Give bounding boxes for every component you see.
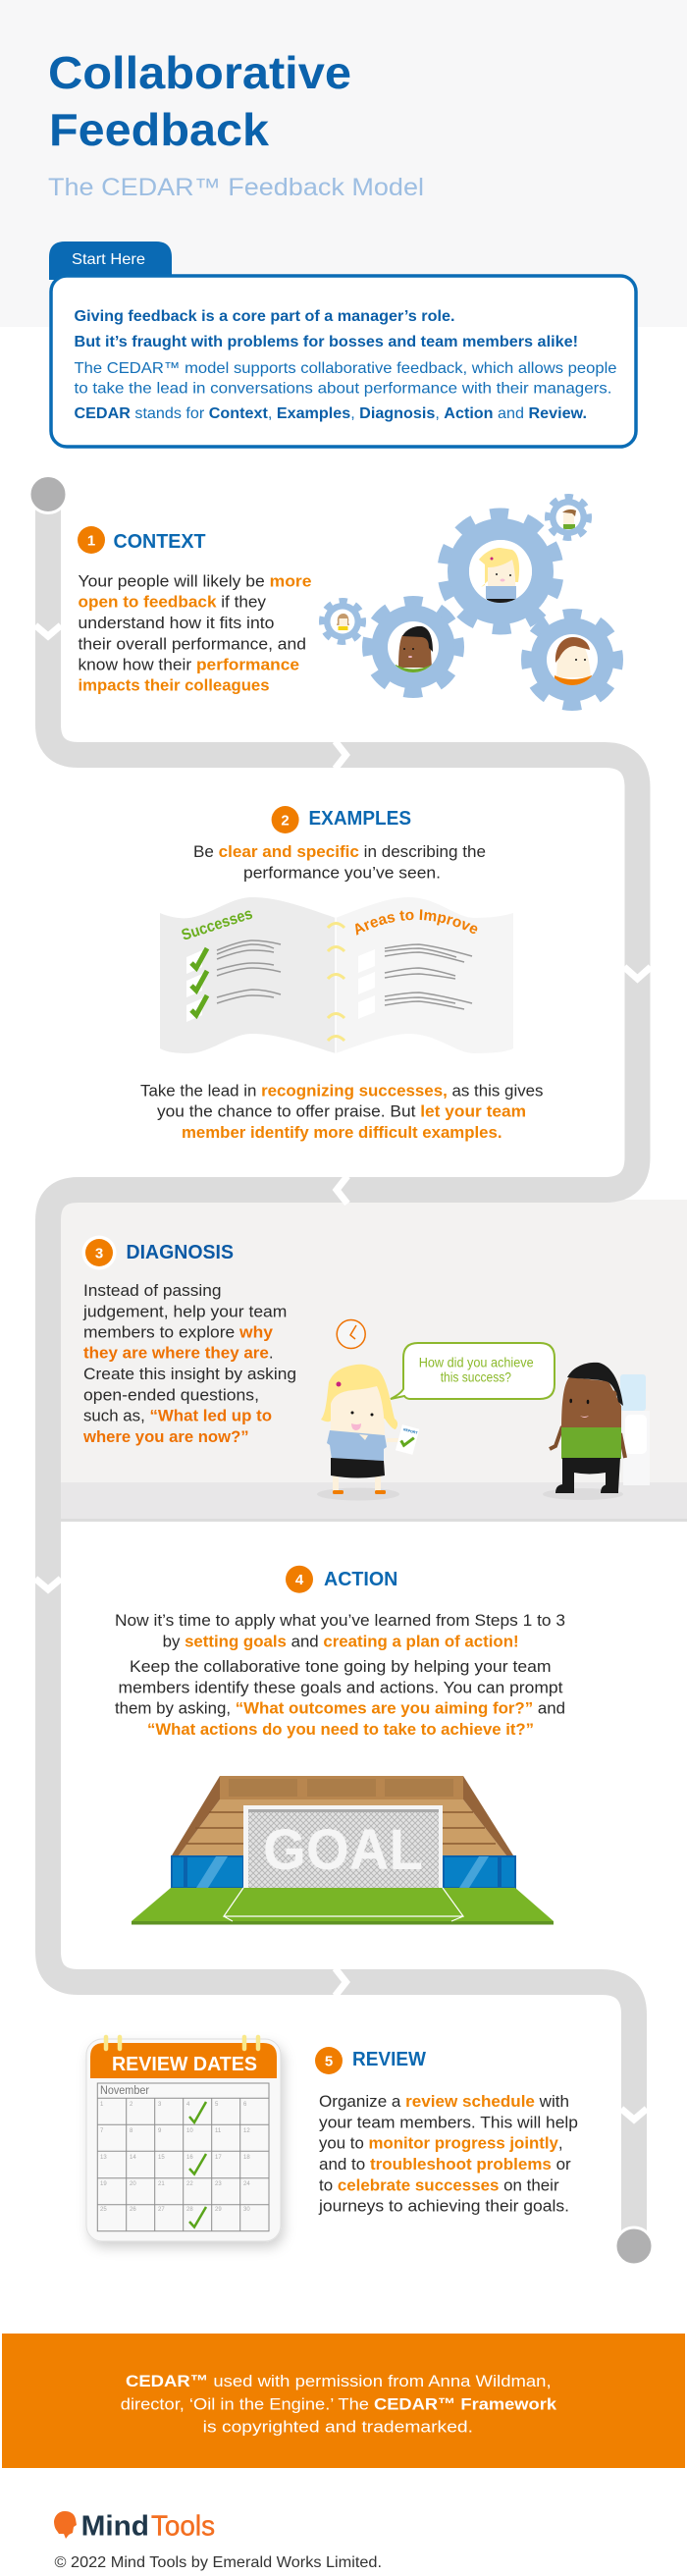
calendar month and dates: 16 [186,2155,193,2161]
calendar month and dates [100,2085,250,2213]
calendar month and dates: 20 [130,2181,136,2187]
panel: diagnosis background [61,1200,687,1522]
section: context [78,494,626,714]
left page [160,897,336,1053]
calendar month and dates: 24 [243,2181,250,2187]
wordmark: tools: Tools [151,2511,215,2543]
intro text: Giving feedback is a core part of a manager’s role. [75,308,454,325]
examples closing text: member identify more difficult examples. [182,1123,502,1142]
examples closing text [140,1082,544,1142]
diagnosis text: Instead of passing [83,1281,222,1300]
context text: know how their performance [79,656,299,673]
action text [115,1611,565,1739]
calendar month and dates: 21 [158,2181,165,2187]
examples closing text: you the chance to offer praise. But let your team [157,1102,526,1121]
footer attribution band: is copyrighted and trademarked. [203,2418,473,2437]
calendar month and dates: 11 [215,2128,222,2134]
step badge 1: 1 [87,532,95,550]
footer attribution band: CEDAR™ used with permission from Anna Wildman, [126,2372,552,2390]
heading: context: CONTEXT [114,531,206,553]
calendar month and dates: 12 [243,2128,250,2134]
section: action [115,1566,565,1924]
path start circle [29,475,67,512]
icon: wall clock [337,1319,365,1349]
step badge 4 [286,1566,313,1593]
step badge 1 [78,526,105,554]
calendar month and dates: 4 [186,2102,190,2108]
calendar month and dates: 26 [130,2207,136,2213]
tab: start here: Start Here [72,251,145,268]
context text: understand how it fits into [79,614,275,632]
action text: by setting goals and creating a plan of action! [163,1632,519,1650]
step badge 2 [272,806,299,833]
calendar grid [97,2083,269,2231]
examples intro text: Be clear and specific in describing the [193,842,486,861]
heading: diagnosis: DIAGNOSIS [126,1242,234,1263]
title: Collaborative [48,47,351,98]
goal frame and net: GOAL [263,1818,423,1882]
step badge 5: 5 [325,2054,333,2069]
title: Feedback [49,104,269,155]
intro text: But it’s fraught with problems for bosses and team members alike! [75,334,578,350]
review text: and to troubleshoot problems or [319,2155,571,2174]
arrow: left [337,1176,347,1204]
calendar month and dates: 22 [186,2181,193,2187]
tab: start here [49,242,172,296]
calendar check marks [189,2102,206,2227]
subtitle: The CEDAR™ Feedback Model [48,174,424,201]
calendar month and dates: 25 [100,2207,107,2213]
icon: head silhouette [54,2511,77,2539]
calendar month and dates: 9 [158,2128,162,2134]
calendar month and dates: 3 [158,2102,162,2108]
calendar illustration [86,2037,281,2241]
review text: you to monitor progress jointly, [319,2134,563,2153]
action text: them by asking, “What outcomes are you aiming for?” and [115,1699,565,1718]
calendar month and dates: 19 [100,2181,107,2187]
icon: gears with team members [319,494,626,714]
blue boards [172,1856,515,1888]
goal frame and net [243,1805,443,1888]
calendar month and dates: 8 [130,2128,133,2134]
diagnosis text: judgement, help your team [82,1302,287,1320]
calendar month and dates: 10 [186,2128,193,2134]
goal illustration [132,1776,554,1924]
intro text: to take the lead in conversations about performance with their managers. [75,381,612,397]
calendar header [90,2037,277,2078]
checklist: areas to improve [358,944,472,1019]
review text: your team members. This will help [319,2113,578,2131]
heading: examples: EXAMPLES [308,808,411,830]
calendar month and dates: 7 [100,2128,104,2134]
logo: mind tools [54,2511,215,2543]
arrow: down 3 [35,1579,61,1589]
path end circle [615,2227,653,2265]
checklist: successes [186,940,281,1022]
step badge 4: 4 [295,1572,304,1588]
section: review [86,2037,578,2241]
calendar month and dates: 30 [243,2207,250,2213]
calendar month and dates: 13 [100,2155,107,2161]
calendar month and dates: 6 [243,2102,247,2108]
header background [0,0,687,327]
wordmark: mind: Mind [81,2511,149,2543]
calendar month and dates: 5 [215,2102,219,2108]
step badge 3: 3 [95,1245,103,1262]
examples closing text: Take the lead in recognizing successes, as this gives [140,1082,544,1100]
diagnosis text: open-ended questions, [83,1385,259,1404]
gear: blonde woman [436,507,565,636]
winding path [29,475,653,2265]
review text: journeys to achieving their goals. [318,2196,569,2215]
label: successes: Successes [180,905,255,944]
examples intro text [193,842,486,883]
heading: action: ACTION [324,1569,397,1590]
gear: dark-haired man [362,596,464,698]
speech bubble: How did you achieve [419,1355,534,1370]
notebook illustration [160,897,513,1053]
context text: open to feedback if they [79,593,266,612]
calendar month and dates: 23 [215,2181,222,2187]
calendar month and dates: 1 [100,2102,104,2108]
gear: small woman [319,598,366,645]
diagnosis text: such as, “What led up to [83,1407,272,1425]
arrow: down 1 [35,625,61,636]
step badge 5 [315,2047,343,2074]
action text: “What actions do you need to take to achieve it?” [147,1720,534,1739]
context text: their overall performance, and [79,634,306,653]
diagnosis text: where you are now?” [82,1427,249,1446]
footer attribution band [2,2334,685,2468]
calendar month and dates: 29 [215,2207,222,2213]
context text: impacts their colleagues [79,676,269,695]
calendar month and dates: 27 [158,2207,165,2213]
review text: to celebrate successes on their [319,2175,559,2194]
intro text: CEDAR stands for Context, Examples, Diagnosis, Action and Review. [75,405,587,422]
gear: small man [545,494,592,541]
stand [172,1776,513,1855]
calendar month and dates: 15 [158,2155,165,2161]
action text: Now it’s time to apply what you’ve learned from Steps 1 to 3 [115,1611,565,1630]
copyright: © 2022 Mind Tools by Emerald Works Limited. [55,2554,382,2571]
intro text [75,308,617,422]
action text: Keep the collaborative tone going by helping your team [130,1657,552,1676]
calendar month and dates: 14 [130,2155,136,2161]
calendar header: REVIEW DATES [112,2054,257,2075]
arrow: right 2 [336,1968,345,1996]
panel: start here intro card [49,242,636,447]
speech bubble: this success? [441,1369,511,1385]
character: woman with report [317,1365,419,1500]
examples intro text: performance you’ve seen. [243,864,441,883]
step badge 2: 2 [281,813,290,829]
arrow: down 4 [621,2109,647,2120]
calendar month and dates: 28 [186,2207,193,2213]
title [48,47,351,155]
pitch [132,1888,554,1924]
review text [318,2092,578,2215]
character: man [543,1363,625,1500]
context text: Your people will likely be more [79,571,312,590]
right page [336,897,513,1053]
calendar month and dates: November [100,2085,149,2097]
calendar month and dates: 2 [130,2102,133,2108]
calendar month and dates: 18 [243,2155,250,2161]
water cooler [620,1374,650,1485]
label: areas to improve: Areas to Improve [355,909,477,936]
report sheet: REPORT [403,1427,419,1435]
heading: review: REVIEW [352,2049,426,2070]
diagnosis text: Create this insight by asking [83,1365,296,1383]
calendar month and dates: 17 [215,2155,222,2161]
footer attribution band: director, ‘Oil in the Engine.’ The CEDAR™ Framework [121,2394,557,2413]
review text: Organize a review schedule with [319,2092,569,2111]
diagnosis text [82,1281,296,1446]
step badge 3 [82,1235,116,1270]
section: diagnosis [82,1235,650,1500]
diagnosis text: members to explore why [83,1323,274,1342]
arrow: right 1 [336,741,345,769]
ring binding [328,923,344,1041]
section: examples [140,806,544,1142]
context text [79,571,312,695]
intro text: The CEDAR™ model supports collaborative feedback, which allows people [75,360,617,377]
speech bubble [391,1343,555,1399]
arrow: down 2 [624,967,651,979]
gear: brown-haired man [521,609,623,711]
diagnosis text: they are where they are. [83,1344,274,1363]
action text: members identify these goals and actions. You can prompt [118,1678,563,1696]
